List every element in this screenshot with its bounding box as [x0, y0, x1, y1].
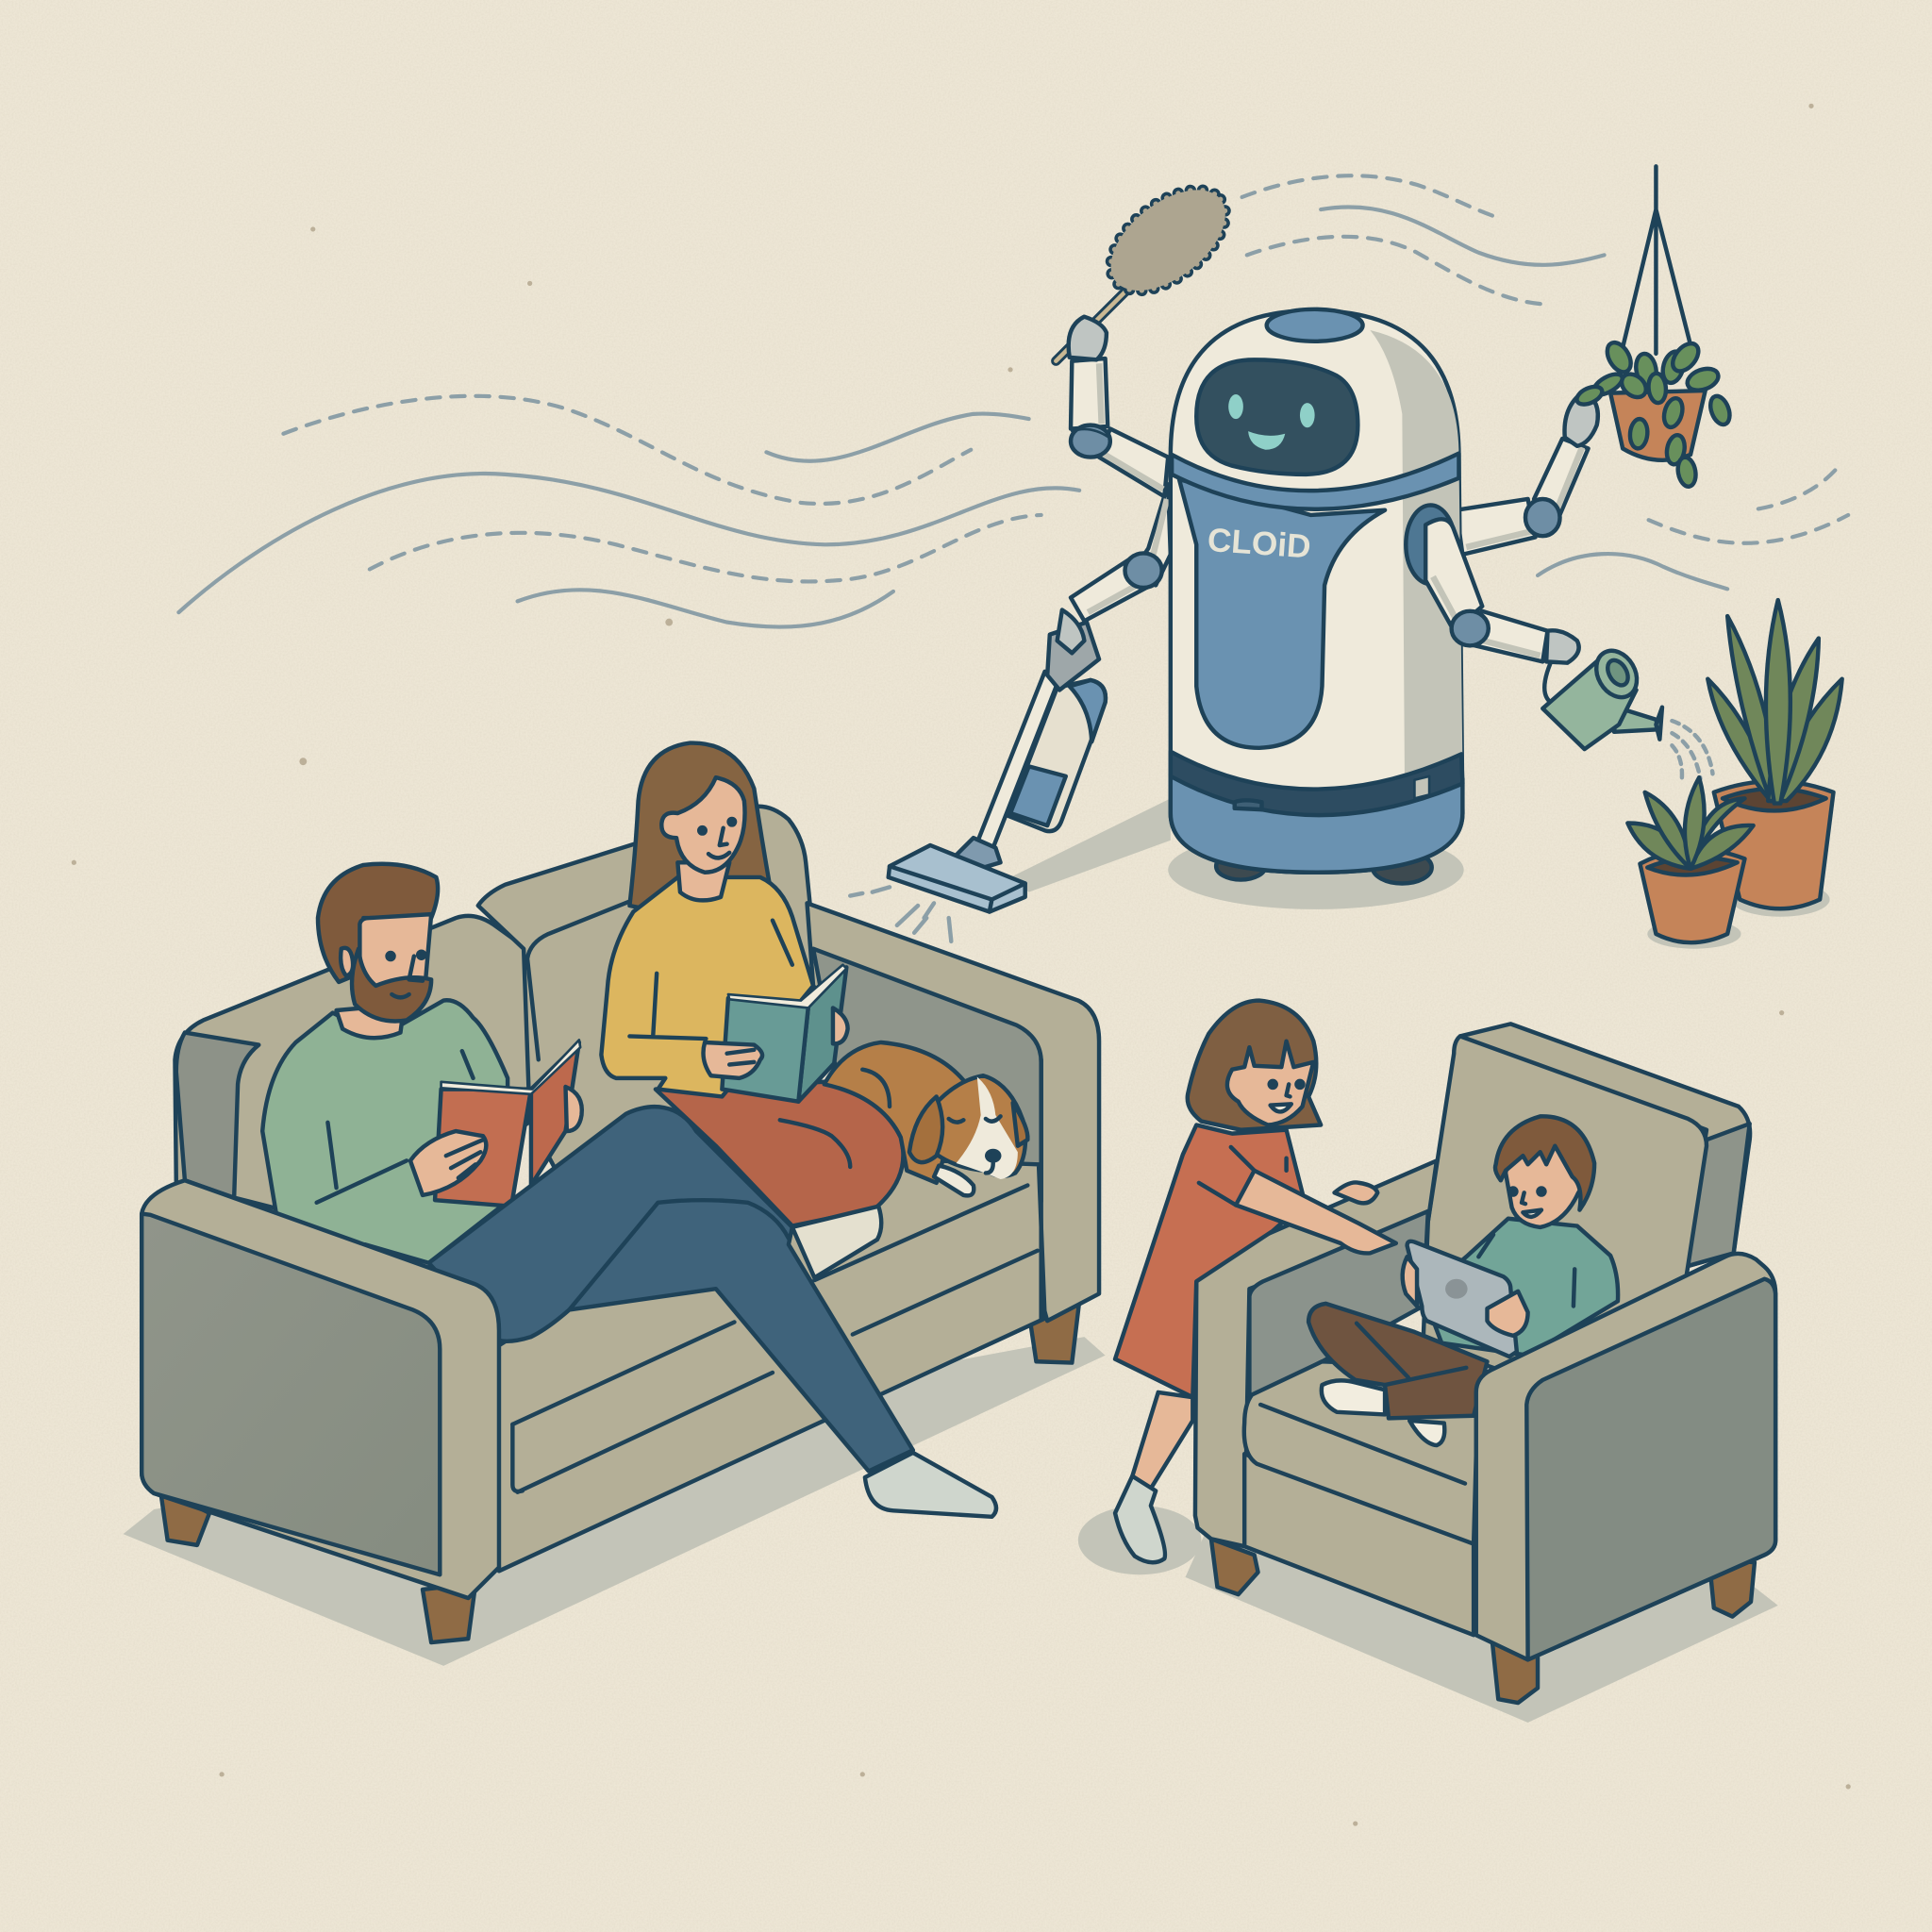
robot dark band: [1171, 752, 1462, 815]
girl hair: [1188, 1001, 1321, 1130]
man neck: [337, 1004, 404, 1038]
sofa back side shade: [176, 1033, 258, 1198]
vacuum bag: [1008, 680, 1106, 831]
robot upper elbow: [1071, 425, 1110, 458]
sofa back cushion right: [478, 807, 818, 1214]
dog face: [949, 1116, 1001, 1173]
water drops: [1672, 721, 1713, 778]
vacuum cleaner: [889, 623, 1106, 912]
robot logo text: CLOiD: [1207, 522, 1312, 566]
dog body: [824, 1042, 965, 1183]
woman socked foot: [792, 1207, 881, 1277]
robot right forearm up: [1534, 439, 1589, 518]
boy socks: [1322, 1380, 1385, 1414]
armchair front base: [1244, 1454, 1474, 1635]
large plant leaves: [1707, 600, 1842, 804]
armchair front arm: [1476, 1254, 1775, 1659]
man sweater: [262, 1000, 508, 1263]
robot collar band: [1172, 454, 1458, 509]
wind lines left: [178, 396, 1079, 627]
girl dress: [1115, 1124, 1305, 1397]
woman skirt: [656, 1082, 903, 1226]
feather duster: [1056, 170, 1243, 361]
robot CLOiD: [850, 170, 1713, 941]
robot lower right elbow: [1452, 611, 1489, 645]
wind lines right: [1538, 462, 1848, 589]
sofa back cushion left: [175, 916, 548, 1232]
robot base: [1171, 774, 1462, 873]
sofa left arm: [142, 1180, 499, 1598]
teal book: [722, 965, 846, 1102]
woman neck and face: [677, 862, 729, 900]
boy facial features: [1509, 1188, 1516, 1195]
robot eyes and smile: [1228, 394, 1315, 450]
sofa right arm: [808, 903, 1099, 1321]
armchair back top: [1460, 1024, 1750, 1267]
girl pointing arm: [1236, 1171, 1396, 1253]
dog blaze: [957, 1077, 1018, 1179]
small potted plant: [1627, 777, 1754, 942]
sofa left arm side panel: [142, 1214, 440, 1574]
robot body: [1171, 310, 1462, 873]
robot left forearm up: [1071, 358, 1108, 429]
small pot soil: [1647, 858, 1738, 875]
man face: [359, 914, 431, 1004]
boy head: [1506, 1140, 1583, 1227]
woman sweater: [601, 877, 813, 1096]
boy: [1308, 1116, 1618, 1445]
robot right elbow: [1525, 499, 1560, 536]
large pot: [1714, 781, 1834, 908]
boy trousers: [1308, 1304, 1487, 1418]
dog head: [922, 1075, 1025, 1176]
robot lower left arm: [1136, 484, 1171, 585]
sofa right arm inner face: [813, 949, 1041, 1201]
robot lower right upper arm: [1425, 519, 1482, 631]
vacuum tube: [977, 672, 1059, 848]
robot hand on plant: [1565, 391, 1598, 446]
robot upper right arm: [1457, 499, 1535, 555]
robot wheels: [1216, 852, 1432, 883]
armchair legs: [1211, 1539, 1755, 1703]
small pot: [1640, 849, 1744, 942]
wind lines upper right: [1242, 175, 1605, 305]
vacuum grip: [1047, 623, 1099, 690]
large potted plant: [1707, 600, 1842, 908]
man hair: [318, 864, 438, 982]
girl: [1115, 1001, 1396, 1562]
small plant leaves: [1627, 777, 1754, 869]
robot lower right forearm: [1465, 611, 1547, 661]
hanging leaves: [1574, 339, 1733, 488]
sofa back inner edge: [527, 899, 635, 1059]
tablet: [1407, 1241, 1517, 1357]
boy hands: [1403, 1257, 1417, 1306]
vacuum dust dashes: [850, 887, 951, 941]
vacuum head: [889, 845, 1025, 912]
large pot soil: [1723, 789, 1826, 810]
man beard: [352, 949, 431, 1021]
woman: [601, 743, 903, 1277]
woman hair back: [629, 743, 770, 918]
robot lower elbow: [1124, 553, 1162, 588]
man facial features: [391, 957, 423, 997]
sofa seat base: [492, 1160, 1045, 1571]
armchair side panel: [1526, 1279, 1775, 1659]
red book: [435, 1040, 580, 1207]
girl other hand: [1335, 1182, 1377, 1203]
hanging strings: [1623, 166, 1690, 354]
boy hair: [1495, 1116, 1594, 1210]
robot hand with duster: [1069, 317, 1107, 359]
hanging plant: [1574, 166, 1733, 488]
robot upper left arm: [1099, 429, 1168, 496]
armchair seat: [1244, 1361, 1478, 1544]
robot shoulder socket: [1406, 506, 1456, 584]
vacuum neck: [949, 838, 1001, 873]
robot face screen: [1196, 359, 1357, 475]
robot head cap: [1267, 309, 1363, 341]
armchair back face: [1424, 1036, 1707, 1380]
girl sock and leg: [1132, 1392, 1192, 1489]
man jeans: [429, 1107, 913, 1472]
man hands: [410, 1087, 582, 1195]
dog ears: [909, 1096, 942, 1162]
woman facial features: [708, 828, 729, 858]
girl face: [1227, 1041, 1313, 1124]
robot lower left forearm: [1071, 558, 1151, 621]
armchair inner face: [1249, 1211, 1428, 1398]
boy sweater: [1424, 1219, 1618, 1356]
man ear: [341, 948, 353, 975]
sofa legs: [160, 1301, 1079, 1642]
robot body shade: [1370, 330, 1462, 778]
armchair: [1115, 1001, 1775, 1703]
armchair back side shade: [1686, 1124, 1750, 1267]
woman hands: [703, 1008, 848, 1078]
dog paw: [934, 1166, 974, 1195]
girl facial features: [1270, 1081, 1276, 1088]
robot chest panel: [1179, 479, 1385, 748]
man: [262, 864, 996, 1517]
dog: [824, 1042, 1027, 1195]
floor shadows: [124, 798, 1830, 1723]
armchair left arm: [1195, 1160, 1437, 1546]
robot hand on vacuum: [1058, 610, 1084, 653]
sofa: [142, 743, 1099, 1642]
robot hand on can: [1546, 630, 1579, 663]
sofa seams: [512, 1185, 1038, 1492]
hanging pot: [1610, 391, 1706, 460]
watering can: [1542, 643, 1662, 749]
man sock: [865, 1453, 996, 1517]
